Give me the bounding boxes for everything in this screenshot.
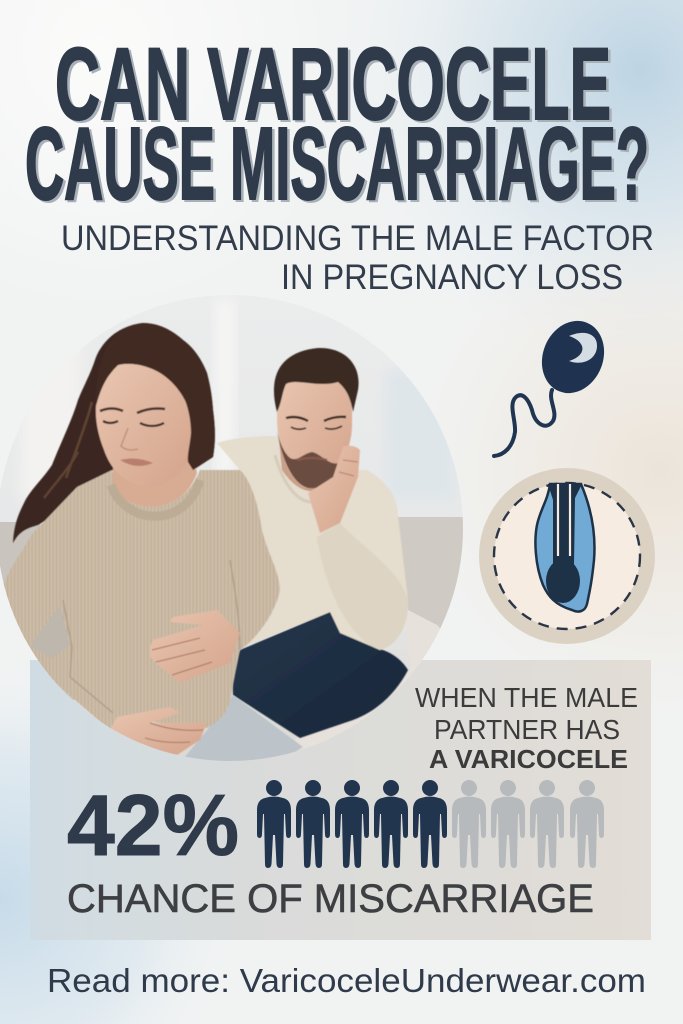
text: male partner: WHEN THE MALE <box>415 682 638 713</box>
man's eyes and brows <box>286 417 346 421</box>
title <box>25 27 652 223</box>
woman's back hair <box>13 323 215 543</box>
cord highlights <box>558 484 570 556</box>
icon: varicocele diagram <box>479 468 655 644</box>
text: male partner: PARTNER HAS <box>434 714 620 745</box>
woman's neck <box>112 460 198 506</box>
woman's face <box>95 363 192 472</box>
woman's front hair <box>95 323 215 470</box>
woman's grey jeans <box>185 694 303 761</box>
sperm highlight <box>569 333 597 363</box>
woman's arm shading <box>63 560 240 713</box>
photo: worried couple on a sofa <box>0 295 470 775</box>
footer link: Read more: VaricoceleUnderwear.com <box>47 962 646 999</box>
subtitle <box>61 219 654 297</box>
man's sweater <box>217 436 408 650</box>
statistic: 42%: 42% <box>67 778 239 874</box>
sofa <box>0 517 470 770</box>
man's neck and head <box>279 442 316 492</box>
text: male partner <box>415 682 638 774</box>
text: male partner: A VARICOCELE <box>429 744 628 774</box>
testicle and cord <box>546 484 582 603</box>
panel: statistic <box>30 660 651 940</box>
man's hand on cheek <box>308 446 360 533</box>
text: chance of miscarriage: CHANCE OF MISCARRIAGE <box>67 877 594 921</box>
sperm tail <box>494 390 554 456</box>
blue vein shape <box>535 484 594 612</box>
dashed outline <box>494 483 640 629</box>
dark people <box>257 780 447 868</box>
man's jeans <box>232 612 408 738</box>
gap between arm and body <box>30 606 70 658</box>
subtitle: UNDERSTANDING THE MALE FACTOR <box>61 219 654 258</box>
woman's upper hand <box>150 610 240 683</box>
outer ring <box>479 468 655 644</box>
woman's sweater and body <box>0 470 280 730</box>
pictogram: people <box>257 780 604 868</box>
woman <box>0 323 303 775</box>
woman's lower hand <box>110 707 207 755</box>
icon: sperm <box>494 311 615 456</box>
man's hair <box>274 348 359 412</box>
man <box>217 348 408 738</box>
subtitle: IN PREGNANCY LOSS <box>281 258 623 297</box>
woman's brows, eyes, mouth <box>100 408 165 413</box>
sperm head <box>531 311 615 403</box>
inner disc <box>494 483 640 629</box>
grey people <box>452 780 604 868</box>
